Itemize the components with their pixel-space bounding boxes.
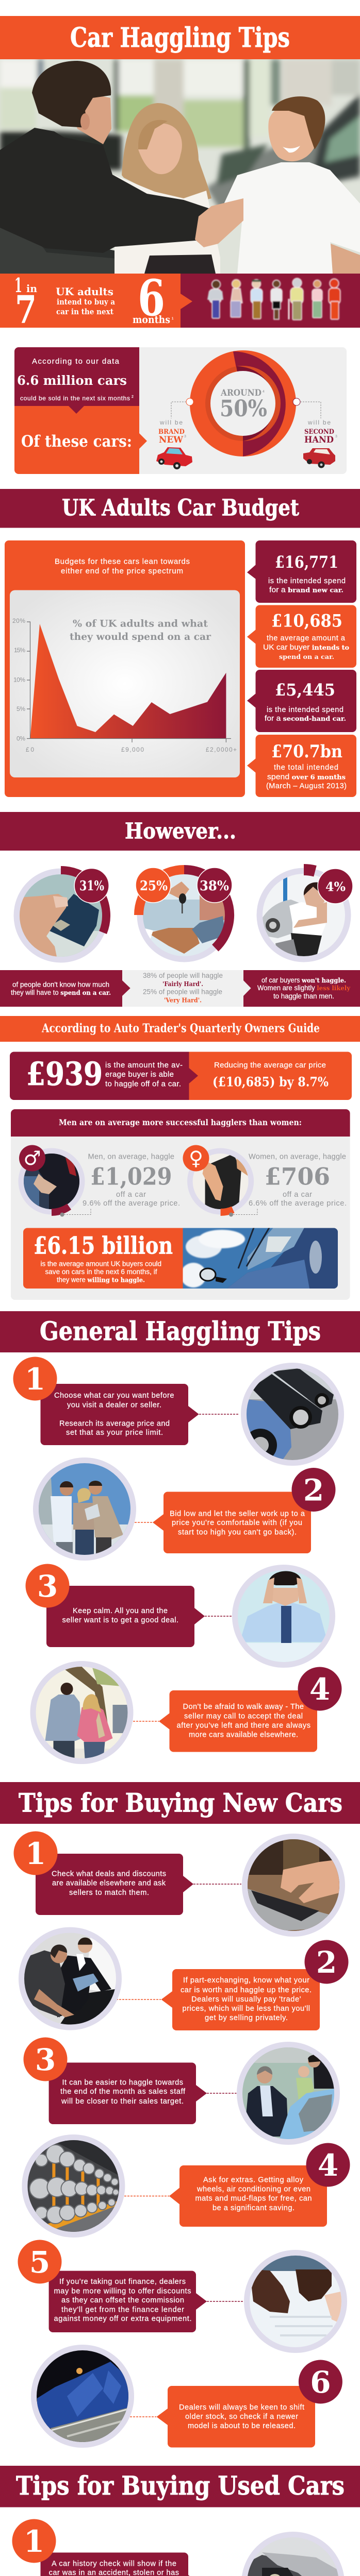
new tip 1: check deals: 1: [25, 1836, 46, 1871]
callout: £16,771: [247, 540, 356, 603]
men stat text: [83, 1153, 180, 1208]
tip 4: walk away: more cars available elsewhere.: [189, 1731, 298, 1739]
women photo and icon: [183, 1145, 254, 1215]
new tip 1: check deals: sellers to match them.: [69, 1889, 149, 1897]
panel: £939 stat: to haggle off of a car.: [105, 1080, 181, 1088]
haggling text strip: 38% of people will haggle: [143, 972, 223, 979]
men photo and icon: [19, 1145, 85, 1215]
new tip 2: part exchange: car is worth and haggle up the price.: [181, 1986, 312, 1994]
panel: 6.6 million cars: 2: [132, 395, 134, 399]
heading: General Haggling Tips: [0, 1311, 360, 1352]
new tip 3: end of the month: the end of the month as sales staff: [60, 2088, 186, 2096]
new tip 6: older stock: model is about to be released.: [188, 2422, 296, 2430]
area chart: 15%: [14, 647, 25, 654]
photo: man and dealer at engine: [19, 1927, 122, 2030]
photo: couple walking: [30, 1661, 133, 1764]
new tip 4: ask for extras: wheels, air conditioning or even: [197, 2185, 310, 2194]
label: second hand: HAND: [304, 435, 334, 445]
tip 1: choose your car: 1: [25, 1362, 45, 1397]
new tip 4: ask for extras: be a significant saving.: [212, 2204, 294, 2212]
callout: £6.15 billion savings: [23, 1228, 338, 1289]
callout: £6.15 billion savings: is the average amount UK buyers could: [40, 1260, 161, 1267]
tip 2: bid low: Bid low and let the seller work up to a: [170, 1510, 305, 1518]
tip 4: walk away: seller may call to accept the deal: [184, 1713, 303, 1721]
donut chart: around 50%: [190, 350, 296, 456]
label: brand new: BRAND: [158, 428, 185, 436]
label: second hand: [304, 419, 337, 445]
new tip 2: part exchange: prices, which will be less than you'll: [183, 2005, 310, 2013]
stat circle: 4% worried woman: 4%: [325, 879, 346, 894]
photo: couple with dealer: [33, 1458, 136, 1561]
donut chart: around 50%: AROUND: [220, 388, 261, 398]
tip 3: keep calm: seller want is to get a good deal.: [62, 1616, 178, 1624]
hero photo: handshake at car dealership: [0, 59, 360, 274]
new tip 1: check deals: Check what deals and discounts: [52, 1870, 166, 1878]
women stat text: off a car: [283, 1191, 312, 1199]
callout: £70.7bn: £70.7bn: [271, 741, 342, 762]
stat strip: 1 in 7 UK adults: in: [26, 282, 37, 295]
callout: £16,771: is the intended spend: [268, 577, 346, 585]
label: brand new: 3: [184, 435, 186, 438]
haggling text strip: 'Very Hard'.: [164, 996, 202, 1004]
women stat text: £706: [265, 1162, 330, 1190]
callout: £5,445: [247, 670, 356, 732]
icon: red used car: [303, 448, 335, 468]
photo: alloy wheel rack: [22, 2134, 125, 2238]
panel: men vs women hagglers: Men are on average more successful hagglers than women:: [59, 1117, 302, 1127]
stat strip: 1 in 7 UK adults: 1: [172, 317, 174, 320]
panel: £939 stat: (£10,685) by 8.7%: [212, 1075, 329, 1089]
new tip 6: older stock: older stock, so check if a newer: [185, 2413, 298, 2421]
tip 1: choose your car: you visit a dealer or seller.: [67, 1401, 161, 1410]
label: second hand: will be: [307, 419, 331, 426]
panel: £939 stat: Reducing the average car price: [214, 1061, 326, 1070]
chart title: % of UK adults and what: [73, 618, 208, 630]
new tip 5: finance offers: as they can offset the commission: [61, 2296, 184, 2304]
label: brand new: will be: [159, 419, 183, 426]
callout: £10,685: [247, 605, 356, 668]
new tip 2: part exchange: get by selling privately.: [205, 2014, 288, 2022]
tip 4: walk away: [30, 1661, 341, 1764]
banner: Auto Trader's Quarterly Owners Guide: [0, 1016, 360, 1042]
new tip 5: finance offers: may be more willing to offer discounts: [54, 2287, 191, 2296]
stat strip: 1 in 7 UK adults: car in the next: [56, 308, 113, 316]
new tip 1: check deals: are available elsewhere and ask: [52, 1879, 166, 1888]
area chart: £0: [26, 746, 34, 753]
tip 1: choose your car: Choose what car you want before: [54, 1392, 174, 1400]
women stat text: 6.6% off the average price.: [249, 1199, 347, 1208]
callout: £10,685: spend on a car.: [279, 653, 334, 660]
haggling text strip: 25% of people will haggle: [143, 988, 222, 995]
label: brand new: [158, 419, 186, 445]
stat strip: 1 in 7 UK adults: months: [133, 313, 170, 326]
panel: £939 stat: erage buyer is able: [105, 1070, 174, 1079]
men stat text: £1,029: [90, 1162, 172, 1190]
haggling text strip: of people don't know how much: [12, 981, 109, 988]
new tip 6: older stock: Dealers will always be keen to shift: [179, 2403, 304, 2412]
women photo and icon: ♀: [189, 1147, 203, 1170]
photo: signing a contract: [244, 2250, 347, 2353]
haggling text strip: [0, 970, 360, 1007]
callout: £70.7bn: [247, 735, 356, 797]
new tip 5: finance offers: 5: [29, 2245, 50, 2280]
tip 3: keep calm: [26, 1564, 335, 1668]
new tip 3: end of the month: [24, 2037, 340, 2145]
tip 4: walk away: Don't be afraid to walk away - The: [183, 1703, 304, 1711]
new tip 2: part exchange: Dealers will usually pay 'trade': [191, 1995, 301, 2004]
used tip 1: history check: A car history check will show if the: [52, 2560, 176, 2568]
tip 1: choose your car: Research its average price and: [59, 1420, 170, 1428]
new tip 6: older stock: [31, 2345, 342, 2448]
stat strip: 1 in 7 UK adults: intend to buy a: [57, 298, 116, 307]
tip 4: walk away: after you've left and there are always: [176, 1722, 310, 1730]
new tip 4: ask for extras: 4: [318, 2148, 338, 2183]
panel: £939 stat: £939: [26, 1055, 103, 1093]
heading: General Haggling Tips: General Haggling Tips: [40, 1316, 321, 1346]
new tip 3: end of the month: 3: [35, 2042, 56, 2077]
tip 2: bid low: 2: [303, 1472, 324, 1507]
tip 2: bid low: start too high you can't go back).: [178, 1528, 297, 1536]
women stat text: [249, 1153, 347, 1208]
new tip 5: finance offers: [18, 2240, 347, 2353]
haggling text strip: of car buyers won't haggle.: [261, 976, 346, 984]
area chart: 20%: [12, 617, 25, 624]
area chart: [12, 617, 237, 753]
haggling text strip: Women are slightly less likely: [257, 984, 351, 992]
stat circle: 38% and 25% handshake: [136, 868, 232, 962]
stat strip: 1 in 7 UK adults: 6: [138, 269, 165, 327]
label: brand new: NEW: [159, 435, 184, 445]
haggling text strip: they will have to spend on a car.: [11, 989, 111, 996]
used tip 1: history check: [12, 2519, 345, 2576]
heading: However: [0, 812, 360, 851]
new tip 4: ask for extras: mats and mud-flaps for free, can: [195, 2195, 312, 2203]
stat strip: 1 in 7 UK adults: 7: [15, 288, 37, 332]
new tip 2: part exchange: If part-exchanging, know what your: [183, 1976, 309, 1985]
new tip 4: ask for extras: Ask for extras. Getting alloy: [203, 2176, 304, 2184]
new tip 2: part exchange: [19, 1927, 349, 2030]
tip 2: bid low: price you're comfortable with (if you: [172, 1519, 302, 1527]
callout: £10,685: the average amount a: [267, 634, 346, 642]
stat circle: 38% and 25% handshake: 38%: [200, 878, 229, 894]
callout: £70.7bn: spend over 6 months: [267, 773, 346, 781]
new tip 6: older stock: 6: [310, 2365, 331, 2400]
callout: £10,685: UK car buyer intends to: [263, 643, 349, 652]
label: second hand: SECOND: [304, 428, 334, 436]
callout: £16,771: £16,771: [275, 552, 338, 572]
new tip 3: end of the month: will be closer to their sales target.: [61, 2097, 184, 2106]
stat circle: 31% credit card: [13, 869, 109, 962]
panel: 6.6 million cars: 6.6 million cars: [17, 373, 127, 388]
new tip 5: finance offers: against money off or extra equipment.: [54, 2315, 192, 2323]
stat strip: 1 in 7 UK adults: UK adults: [56, 285, 113, 298]
used tip 1: history check: 1: [24, 2524, 44, 2559]
haggling text strip: 'Fairly Hard'.: [162, 980, 203, 988]
stat strip: 1 in 7 UK adults: [0, 269, 360, 332]
callout: £70.7bn: the total intended: [274, 764, 338, 772]
men stat text: 9.6% off the average price.: [83, 1199, 180, 1208]
men stat text: Men, on average, haggle: [88, 1153, 174, 1161]
heading: Tips for Buying New Cars: [0, 1782, 360, 1824]
chart title: [70, 618, 211, 642]
area chart: 0%: [17, 735, 25, 742]
new tip 5: finance offers: If you're taking out finance, dealers: [59, 2278, 186, 2286]
panel: 6.6 million cars: could be sold in the next six months: [20, 395, 130, 402]
donut chart: around 50%: 50%: [220, 396, 267, 422]
heading: However: However...: [125, 818, 236, 844]
panel: £939 stat: [10, 1052, 352, 1100]
tip 1: choose your car: [13, 1357, 344, 1466]
callout: £5,445: is the intended spend: [267, 706, 343, 714]
panel: £939 stat: is the amount the av-: [105, 1061, 183, 1070]
callout: £6.15 billion savings: they were willing to haggle.: [57, 1276, 145, 1284]
photo: parked cars: [241, 1363, 344, 1466]
panel: budget chart: [5, 540, 245, 797]
tip 3: keep calm: Keep calm. All you and the: [73, 1607, 168, 1615]
heading: UK Adults Car Budget: [0, 489, 360, 528]
panel: 6.6 million cars: [14, 347, 347, 474]
stat circle: 31% credit card: 31%: [79, 878, 104, 894]
tip 2: bid low: [33, 1458, 335, 1561]
women stat text: Women, on average, haggle: [249, 1153, 346, 1161]
callout: £5,445: for a second-hand car.: [265, 715, 346, 723]
photo: salesman and couple: [237, 2042, 340, 2145]
stat circle: 38% and 25% handshake: 25%: [140, 878, 168, 894]
callout: £5,445: £5,445: [275, 680, 335, 700]
photo: covered car: [31, 2345, 134, 2448]
callout: £6.15 billion savings: save on cars in the next 6 months, if: [45, 1268, 157, 1276]
label: second hand: 3: [335, 435, 337, 438]
area chart: 10%: [13, 676, 25, 683]
panel: 6.6 million cars: Of these cars:: [21, 432, 132, 451]
stat strip: 1 in 7 UK adults: 1: [14, 274, 22, 297]
photo: typing on laptop: [242, 1834, 345, 1937]
title banner: Car Haggling Tips: [70, 22, 290, 54]
title banner: [0, 16, 360, 59]
panel: budget chart: Budgets for these cars lean towards: [55, 557, 190, 566]
area chart: £9,000: [121, 746, 144, 753]
new tip 2: part exchange: 2: [316, 1945, 337, 1980]
panel: 6.6 million cars: According to our data: [32, 357, 120, 366]
callout: £16,771: for a brand new car.: [269, 586, 343, 595]
tip 4: walk away: 4: [309, 1672, 330, 1707]
tip 3: keep calm: 3: [37, 1569, 58, 1604]
photo: stressed man: [232, 1565, 335, 1668]
heading: UK Adults Car Budget: UK Adults Car Budget: [62, 495, 300, 521]
panel: budget chart: either end of the price spectrum: [61, 567, 183, 575]
icon: red new car: [156, 447, 192, 469]
haggling text strip: to haggle than men.: [273, 992, 334, 1000]
photo: car reflecting clouds: [181, 1228, 338, 1289]
photo: crashed car: [241, 2532, 345, 2576]
donut chart: around 50%: 4: [263, 390, 265, 394]
area chart: 5%: [17, 705, 25, 713]
callout: £70.7bn: (March – August 2013): [266, 782, 347, 790]
area chart: £2,0000+: [206, 746, 237, 753]
panel: men vs women hagglers: [11, 1109, 350, 1300]
stat circle: 4% worried woman: [257, 868, 353, 962]
callout: £10,685: £10,685: [271, 611, 342, 632]
new tip 1: check deals: [13, 1831, 345, 1937]
men photo and icon: ♂: [23, 1147, 41, 1170]
new tip 3: end of the month: It can be easier to haggle towards: [62, 2078, 183, 2087]
icons: row of seven people: [208, 278, 340, 320]
new tip 5: finance offers: they'll get from the finance lender: [61, 2306, 184, 2314]
callout: £6.15 billion savings: £6.15 billion: [34, 1231, 173, 1259]
chart title: they would spend on a car: [70, 631, 211, 642]
new tip 4: ask for extras: [22, 2134, 350, 2238]
men stat text: off a car: [116, 1191, 146, 1199]
tip 1: choose your car: set that as your price limit.: [66, 1429, 163, 1437]
